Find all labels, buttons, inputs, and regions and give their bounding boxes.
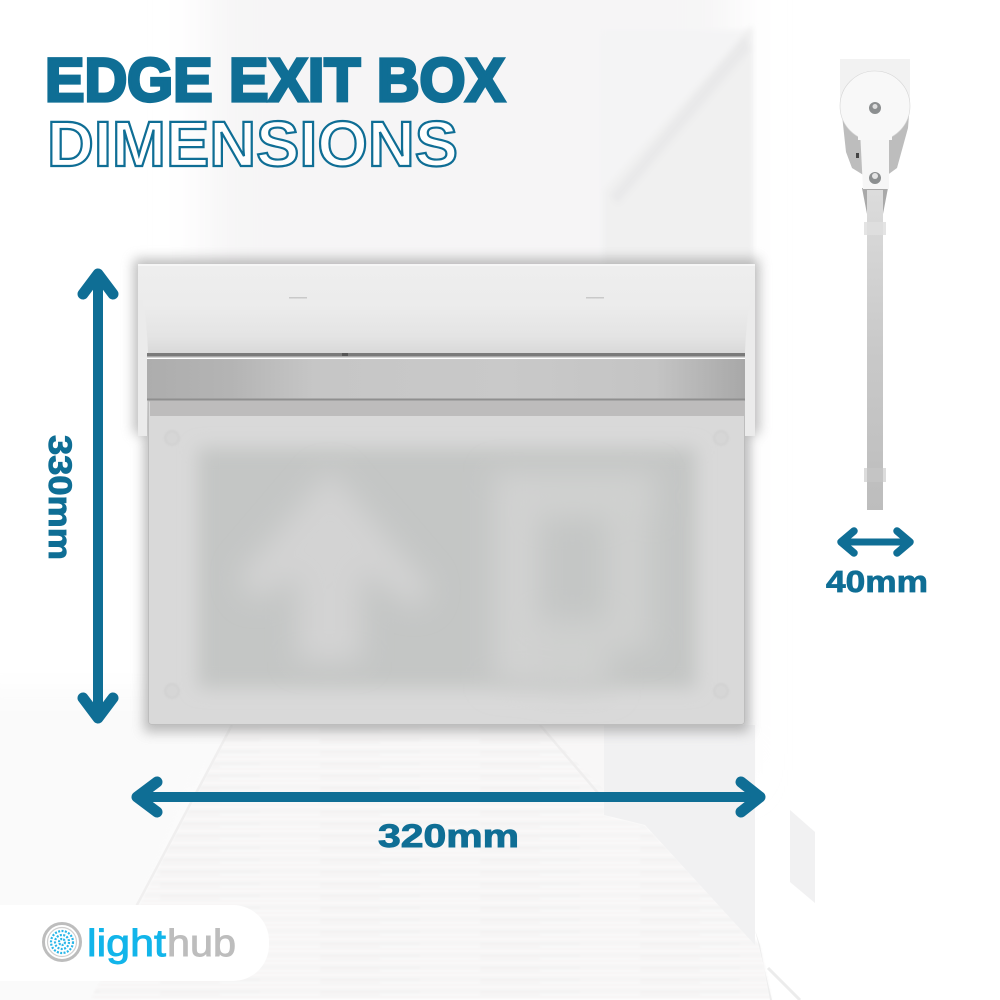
blurred exit graphic field <box>198 448 696 688</box>
door frame <box>604 25 752 280</box>
left wall <box>0 690 250 1000</box>
depth arrow <box>841 531 910 553</box>
hinge disc <box>840 71 910 141</box>
title <box>45 46 505 180</box>
wall bracket <box>840 59 910 109</box>
logo icon <box>44 924 80 960</box>
sign shadow <box>134 259 759 732</box>
label: 40mm: 40mm <box>826 564 928 599</box>
stem tabs <box>864 222 886 235</box>
title line 2 (outlined): DIMENSIONS <box>47 108 458 180</box>
back wall and ceiling <box>205 0 735 770</box>
housing shadow body <box>842 115 909 176</box>
wall plate <box>790 810 815 903</box>
arm <box>860 130 889 189</box>
wedge <box>862 188 888 214</box>
screws <box>165 431 728 698</box>
lower screw <box>869 172 881 184</box>
right edge of wall <box>600 30 752 790</box>
exit sign side view <box>840 59 910 510</box>
shade strip under bar <box>150 400 744 416</box>
small dark clip <box>856 153 859 158</box>
aluminium bar <box>147 359 745 400</box>
stem <box>867 190 883 510</box>
width arrow <box>137 782 760 812</box>
logo pill <box>0 905 269 981</box>
carpet floor <box>90 725 772 1000</box>
top screw <box>869 102 881 114</box>
exit sign front view <box>134 259 759 732</box>
blurred running man <box>494 472 654 690</box>
label: 320mm: 320mm <box>378 818 519 854</box>
title line 1: EDGE EXIT BOX <box>45 46 505 114</box>
height arrow <box>83 274 113 718</box>
logo pill: hub <box>167 923 236 965</box>
frosted panel <box>148 400 745 725</box>
blurred arrow <box>238 470 432 662</box>
lower door <box>604 725 755 945</box>
label: 330mm: 330mm <box>42 435 78 560</box>
logo wordmark: light <box>87 923 166 965</box>
top housing <box>138 264 755 436</box>
